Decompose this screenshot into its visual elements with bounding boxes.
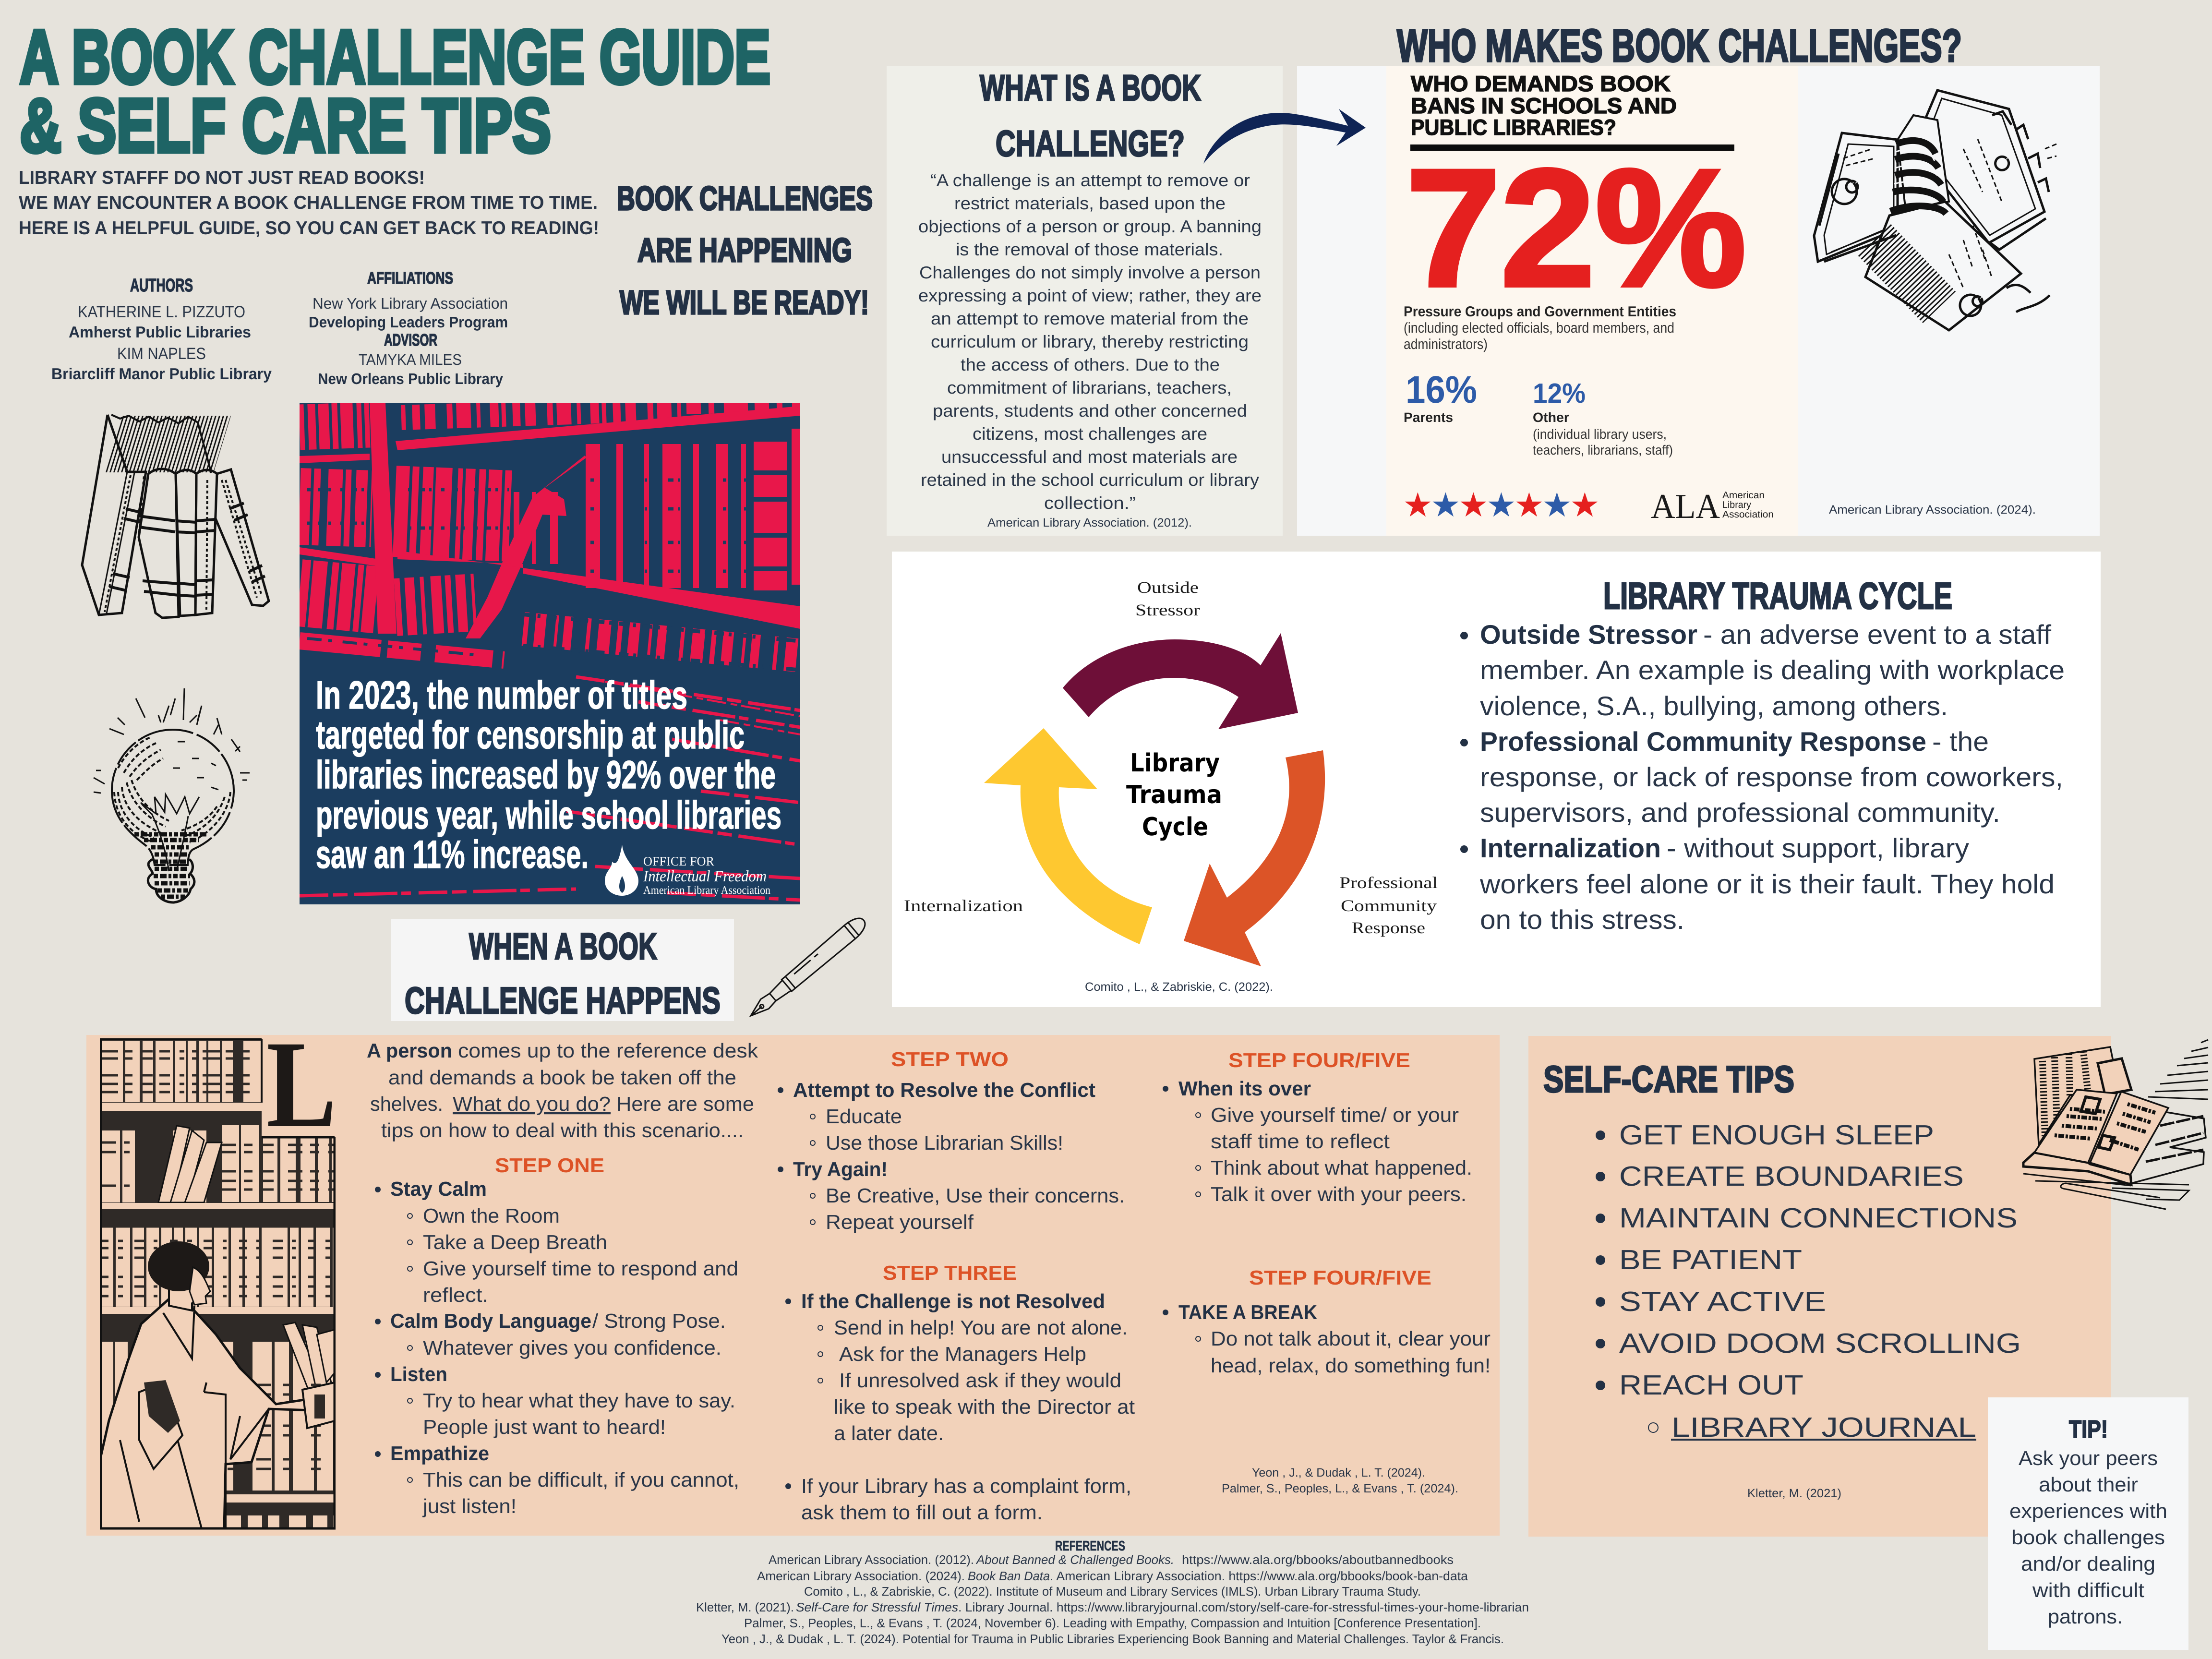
step four/five: when its over: Give yourself time/ or your (1211, 1104, 1459, 1126)
affiliations and advisor: Developing Leaders Program (309, 313, 508, 331)
step three (785, 1262, 1135, 1524)
step four/five: when its over: STEP FOUR/FIVE (1228, 1049, 1410, 1071)
step three: STEP THREE (883, 1262, 1017, 1284)
step one: Empathize (390, 1442, 489, 1465)
pressure groups label: administrators) (1404, 337, 1488, 352)
step three: If unresolved ask if they would (839, 1369, 1121, 1392)
tips list: MAINTAIN CONNECTIONS (1619, 1202, 2018, 1234)
reference list: American Library Association. (2024). (757, 1569, 965, 1583)
step two: Educate (826, 1105, 902, 1128)
step four/five: when its over (1163, 1049, 1472, 1205)
12% other (1533, 378, 1673, 457)
panel heading: CHALLENGE? (996, 123, 1185, 164)
professional community response label: Response (1352, 919, 1425, 937)
tip text (2009, 1447, 2167, 1628)
icon: fountain pen (745, 914, 869, 1022)
pressure groups label: Pressure Groups and Government Entities (1404, 304, 1676, 320)
outside stressor label: Outside (1137, 579, 1199, 597)
panel: library trauma cycle (892, 552, 2101, 1007)
chart title: PUBLIC LIBRARIES? (1411, 115, 1616, 140)
slogan: book challenges are happening: ARE HAPPENING (637, 231, 852, 269)
cycle descriptions: - the (1932, 726, 1989, 757)
step one: Try to hear what they have to say. (423, 1389, 735, 1412)
cycle descriptions: Internalization (1480, 833, 1661, 863)
poster headline: saw an 11% increase. (316, 833, 589, 877)
panel: self-care tips (1528, 1036, 2111, 1537)
tip text: experiences with (2009, 1500, 2167, 1522)
heading: who makes book challenges: WHO MAKES BOOK CHALLENGES? (1397, 20, 1962, 72)
16% parents (1404, 368, 1477, 425)
definition quote (918, 170, 1262, 513)
step three: ask them to fill out a form. (801, 1501, 1043, 1524)
decorative letter L: L (266, 1015, 337, 1154)
office for intellectual freedom logo text: OFFICE FOR (643, 854, 714, 868)
citations: Palmer, S., Peoples, L., & Evans , T. (2024). (1222, 1482, 1458, 1495)
definition quote: is the removal of those materials. (956, 240, 1223, 259)
panel heading: LIBRARY TRAUMA CYCLE (1603, 575, 1952, 617)
chart title: BANS IN SCHOOLS AND (1411, 93, 1677, 118)
step two: Be Creative, Use their concerns. (826, 1184, 1125, 1207)
cycle descriptions: Professional Community Response (1480, 726, 1926, 757)
step one: Own the Room (423, 1204, 560, 1227)
definition quote: citizens, most challenges are (973, 424, 1207, 444)
reference list: Book Ban Data (968, 1569, 1050, 1583)
step two: Repeat yourself (826, 1211, 974, 1233)
illustration: woman at library bookshelf (100, 1015, 337, 1528)
step four/five: when its over: staff time to reflect (1211, 1130, 1390, 1153)
heading: when a book challenge happens: WHEN A BOOK (469, 925, 657, 967)
slogan: book challenges are happening: BOOK CHALLENGES (617, 180, 873, 217)
step one: Listen (390, 1363, 447, 1385)
ala statistic chart (1386, 66, 1798, 536)
tips list: GET ENOUGH SLEEP (1619, 1119, 1934, 1151)
tip text: Ask your peers (2019, 1447, 2158, 1469)
stars: ★ (1403, 485, 1433, 525)
pressure groups label (1404, 304, 1676, 352)
definition quote: “A challenge is an attempt to remove or (930, 170, 1250, 190)
icon: old open books (1814, 90, 2056, 330)
intro scenario: What do you do? (453, 1093, 611, 1115)
chart title (1411, 71, 1677, 140)
step four/five: when its over: When its over (1178, 1077, 1311, 1100)
intro scenario: Here are some (616, 1093, 754, 1115)
authors: KATHERINE L. PIZZUTO (78, 303, 245, 321)
panel: who makes book challenges (1297, 66, 2100, 536)
outside stressor label: Stressor (1135, 601, 1201, 619)
office for intellectual freedom logo text (643, 854, 770, 897)
ala logo: Association (1722, 509, 1774, 520)
icon: stack of leaning books (82, 415, 269, 618)
intro text: WE MAY ENCOUNTER A BOOK CHALLENGE FROM TIME TO TIME. (19, 192, 598, 213)
stars: ★ (1542, 485, 1572, 525)
step one: Stay Calm (390, 1178, 487, 1200)
panel: what is a book challenge (887, 66, 1283, 536)
step three: Ask for the Managers Help (839, 1343, 1086, 1365)
big number 72%: 72% (1406, 134, 1746, 321)
reference list (696, 1552, 1529, 1646)
tip text: book challenges (2011, 1526, 2165, 1549)
tips list: LIBRARY JOURNAL (1671, 1412, 1976, 1443)
tip text: about their (2039, 1473, 2138, 1496)
intro text: HERE IS A HELPFUL GUIDE, SO YOU CAN GET BACK TO READING! (19, 218, 599, 239)
affiliations and advisor: AFFILIATIONS (367, 269, 453, 288)
cycle descriptions (1460, 619, 2065, 935)
intro scenario: shelves. (370, 1093, 443, 1115)
title: & SELF CARE TIPS (20, 84, 551, 168)
step one: STEP ONE (495, 1154, 604, 1177)
center label: Trauma (1126, 781, 1222, 809)
reference list: https://www.ala.org/bbooks/aboutbannedbooks (1182, 1552, 1454, 1567)
step two: Try Again! (793, 1158, 888, 1180)
step one: Give yourself time to respond and (423, 1257, 738, 1280)
cycle descriptions: - without support, library (1667, 833, 1969, 863)
step four/five: take a break: STEP FOUR/FIVE (1249, 1266, 1431, 1289)
12% other: teachers, librarians, staff) (1533, 443, 1673, 457)
tips list: AVOID DOOM SCROLLING (1619, 1328, 2021, 1359)
stars (1403, 485, 1600, 525)
panel heading: WHAT IS A BOOK (980, 68, 1201, 108)
reference list: Yeon , J., & Dudak , L. T. (2024). Potential for Trauma in Public Libraries Experiencing Book Banning and Material Challenges. Taylor & Francis. (721, 1632, 1504, 1646)
office for intellectual freedom logo text: Intellectual Freedom (643, 868, 767, 885)
poster headline: targeted for censorship at public (316, 713, 745, 757)
arrow: internalization (984, 728, 1152, 944)
definition quote: collection.” (1044, 493, 1136, 513)
citation: American Library Association. (2024). (1829, 503, 2036, 517)
ala logo: American (1722, 490, 1765, 501)
definition quote: restrict materials, based upon the (954, 193, 1226, 213)
stars: ★ (1514, 485, 1544, 525)
reference list: . Library Journal. https://www.libraryjournal.com/story/self-care-for-stressful-times-your-home-librarian (958, 1600, 1529, 1614)
definition quote: unsuccessful and most materials are (941, 447, 1238, 467)
citation: Comito , L., & Zabriskie, C. (2022). (1085, 980, 1273, 994)
affiliations and advisor: New Orleans Public Library (318, 370, 503, 387)
office for intellectual freedom logo text: American Library Association (643, 884, 770, 897)
12% other: (individual library users, (1533, 427, 1667, 442)
reference list: American Library Association. (2012). (769, 1552, 974, 1567)
step one: just listen! (422, 1495, 517, 1517)
arrow: professional community response (1184, 750, 1325, 966)
step two: Use those Librarian Skills! (826, 1131, 1063, 1154)
authors: AUTHORS (130, 276, 193, 296)
16% parents: Parents (1404, 410, 1453, 425)
reference list: Self-Care for Stressful Times (796, 1600, 958, 1614)
definition quote: parents, students and other concerned (933, 401, 1247, 421)
step three: Send in help! You are not alone. (834, 1316, 1128, 1339)
cycle descriptions: on to this stress. (1480, 904, 1684, 935)
cycle descriptions: member. An example is dealing with workplace (1480, 655, 2065, 685)
icon: flame logo (605, 845, 638, 896)
internalization label: Internalization (904, 897, 1023, 915)
authors (51, 276, 272, 383)
definition quote: expressing a point of view; rather, they are (918, 286, 1262, 305)
cycle diagram (904, 579, 1438, 994)
definition quote: objections of a person or group. A banning (918, 216, 1262, 236)
step one (375, 1154, 739, 1517)
arrow: outside stressor (1063, 633, 1298, 729)
chart title: WHO DEMANDS BOOK (1411, 71, 1671, 96)
center label: Library (1130, 749, 1220, 778)
panel heading (980, 68, 1201, 164)
tips list: STAY ACTIVE (1619, 1286, 1826, 1317)
stars: ★ (1431, 485, 1461, 525)
16% parents: 16% (1406, 368, 1477, 411)
arrow (1203, 109, 1366, 164)
intro scenario: tips on how to deal with this scenario.... (381, 1119, 744, 1142)
definition quote: commitment of librarians, teachers, (947, 378, 1232, 397)
intro scenario: and demands a book be taken off the (388, 1066, 736, 1089)
citation: Kletter, M. (2021) (1747, 1487, 1841, 1500)
slogan: book challenges are happening (617, 180, 873, 321)
reference list: Palmer, S., Peoples, L., & Evans , T. (2024, November 6). Leading with Empathy, Compassion and Intuition [Conference Presentation]. (744, 1616, 1481, 1630)
callout: tip (1988, 1397, 2188, 1650)
reference list: Comito , L., & Zabriskie, C. (2022). Institute of Museum and Library Services (IMLS). Urban Library Trauma Study. (804, 1584, 1421, 1599)
pressure groups label: (including elected officials, board members, and (1404, 320, 1674, 336)
cycle descriptions: response, or lack of response from coworkers, (1480, 762, 2063, 792)
reference list: . American Library Association. https://www.ala.org/bbooks/book-ban-data (1050, 1569, 1468, 1583)
12% other: 12% (1533, 378, 1586, 409)
affiliations and advisor (309, 269, 508, 387)
authors: KIM NAPLES (117, 345, 206, 363)
step four/five: take a break: head, relax, do something fun! (1211, 1354, 1491, 1377)
step three: If the Challenge is not Resolved (801, 1290, 1105, 1312)
authors: Amherst Public Libraries (69, 323, 251, 341)
step four/five: take a break (1163, 1266, 1491, 1377)
step three: If your Library has a complaint form, (801, 1475, 1131, 1497)
cycle descriptions: workers feel alone or it is their fault. They hold (1479, 869, 2055, 899)
intro scenario: A person (367, 1039, 452, 1062)
definition quote: curriculum or library, thereby restricting (931, 332, 1249, 351)
step one: / Strong Pose. (592, 1310, 726, 1332)
affiliations and advisor: TAMYKA MILES (359, 351, 462, 368)
poster headline: libraries increased by 92% over the (316, 753, 776, 797)
references: REFERENCES (1055, 1539, 1125, 1554)
poster headline (316, 673, 781, 877)
step two: STEP TWO (891, 1048, 1009, 1070)
definition quote: Challenges do not simply involve a person (919, 263, 1261, 282)
step one: People just want to heard! (423, 1416, 666, 1438)
heading: when a book challenge happens: CHALLENGE HAPPENS (405, 979, 721, 1022)
intro scenario (367, 1039, 758, 1142)
step one: Take a Deep Breath (423, 1231, 607, 1253)
cycle descriptions: violence, S.A., bullying, among others. (1480, 691, 1948, 721)
references (696, 1539, 1529, 1646)
tip text: with difficult (2032, 1579, 2144, 1601)
callout: tip: TIP! (2069, 1416, 2108, 1443)
tips list: BE PATIENT (1619, 1244, 1802, 1275)
step four/five: take a break: TAKE A BREAK (1178, 1301, 1317, 1323)
tip text: and/or dealing (2021, 1552, 2155, 1575)
step one: Whatever gives you confidence. (423, 1336, 721, 1359)
outside stressor label (1135, 579, 1201, 619)
poster headline: previous year, while school libraries (316, 793, 781, 837)
definition quote: an attempt to remove material from the (931, 309, 1249, 328)
tips list: REACH OUT (1619, 1370, 1803, 1401)
professional community response label: Professional (1339, 874, 1438, 892)
icon: open book and stacked books (2023, 1040, 2208, 1209)
step three: a later date. (834, 1422, 944, 1444)
title (20, 15, 770, 168)
tips list (1596, 1119, 2021, 1443)
title: A BOOK CHALLENGE GUIDE (20, 15, 770, 99)
ala logo: ALA (1651, 487, 1720, 526)
definition quote: the access of others. Due to the (961, 355, 1220, 374)
stars: ★ (1570, 485, 1600, 525)
panel heading: SELF-CARE TIPS (1543, 1058, 1794, 1100)
intro scenario: comes up to the reference desk (458, 1039, 758, 1062)
12% other: Other (1533, 410, 1569, 425)
definition quote: retained in the school curriculum or library (921, 470, 1259, 490)
step four/five: take a break: Do not talk about it, clear your (1211, 1327, 1491, 1350)
stars: ★ (1458, 485, 1489, 525)
step two: Attempt to Resolve the Conflict (793, 1079, 1095, 1101)
intro text: LIBRARY STAFFF DO NOT JUST READ BOOKS! (19, 168, 425, 188)
center label: Cycle (1142, 813, 1208, 842)
citations (1222, 1466, 1458, 1495)
center label (1126, 749, 1222, 842)
panel: when a book challenge happens steps (86, 1015, 1500, 1536)
cycle descriptions: - an adverse event to a staff (1703, 619, 2051, 649)
citations: Yeon , J., & Dudak , L. T. (2024). (1252, 1466, 1425, 1479)
affiliations and advisor: New York Library Association (313, 295, 508, 312)
ala logo: Library (1722, 500, 1751, 510)
heading: when a book challenge happens (391, 919, 734, 1022)
icon: light bulb (94, 688, 250, 902)
step one: This can be difficult, if you cannot, (423, 1468, 739, 1491)
cycle descriptions: supervisors, and professional community. (1480, 797, 2000, 828)
cycle descriptions: Outside Stressor (1480, 619, 1697, 649)
affiliations and advisor: ADVISOR (384, 331, 437, 349)
reference list: About Banned & Challenged Books. (975, 1552, 1174, 1567)
step four/five: when its over: Think about what happened. (1211, 1156, 1472, 1179)
poster: censorship statistic (300, 403, 800, 904)
citation: American Library Association. (2012). (987, 516, 1192, 529)
step four/five: when its over: Talk it over with your peers. (1211, 1183, 1467, 1205)
step one: Calm Body Language (390, 1310, 591, 1332)
authors: Briarcliff Manor Public Library (51, 365, 272, 383)
poster headline: In 2023, the number of titles (316, 673, 687, 717)
stars: ★ (1486, 485, 1516, 525)
slogan: book challenges are happening: WE WILL BE READY! (620, 284, 869, 321)
professional community response label (1339, 874, 1438, 937)
step two (778, 1048, 1125, 1233)
ala logo (1651, 487, 1774, 526)
reference list: Kletter, M. (2021). (696, 1600, 794, 1614)
step three: like to speak with the Director at (834, 1395, 1135, 1418)
tip text: patrons. (2048, 1605, 2123, 1628)
intro text (19, 168, 599, 239)
tips list: CREATE BOUNDARIES (1619, 1161, 1964, 1192)
step one: reflect. (423, 1284, 488, 1306)
professional community response label: Community (1341, 897, 1437, 915)
